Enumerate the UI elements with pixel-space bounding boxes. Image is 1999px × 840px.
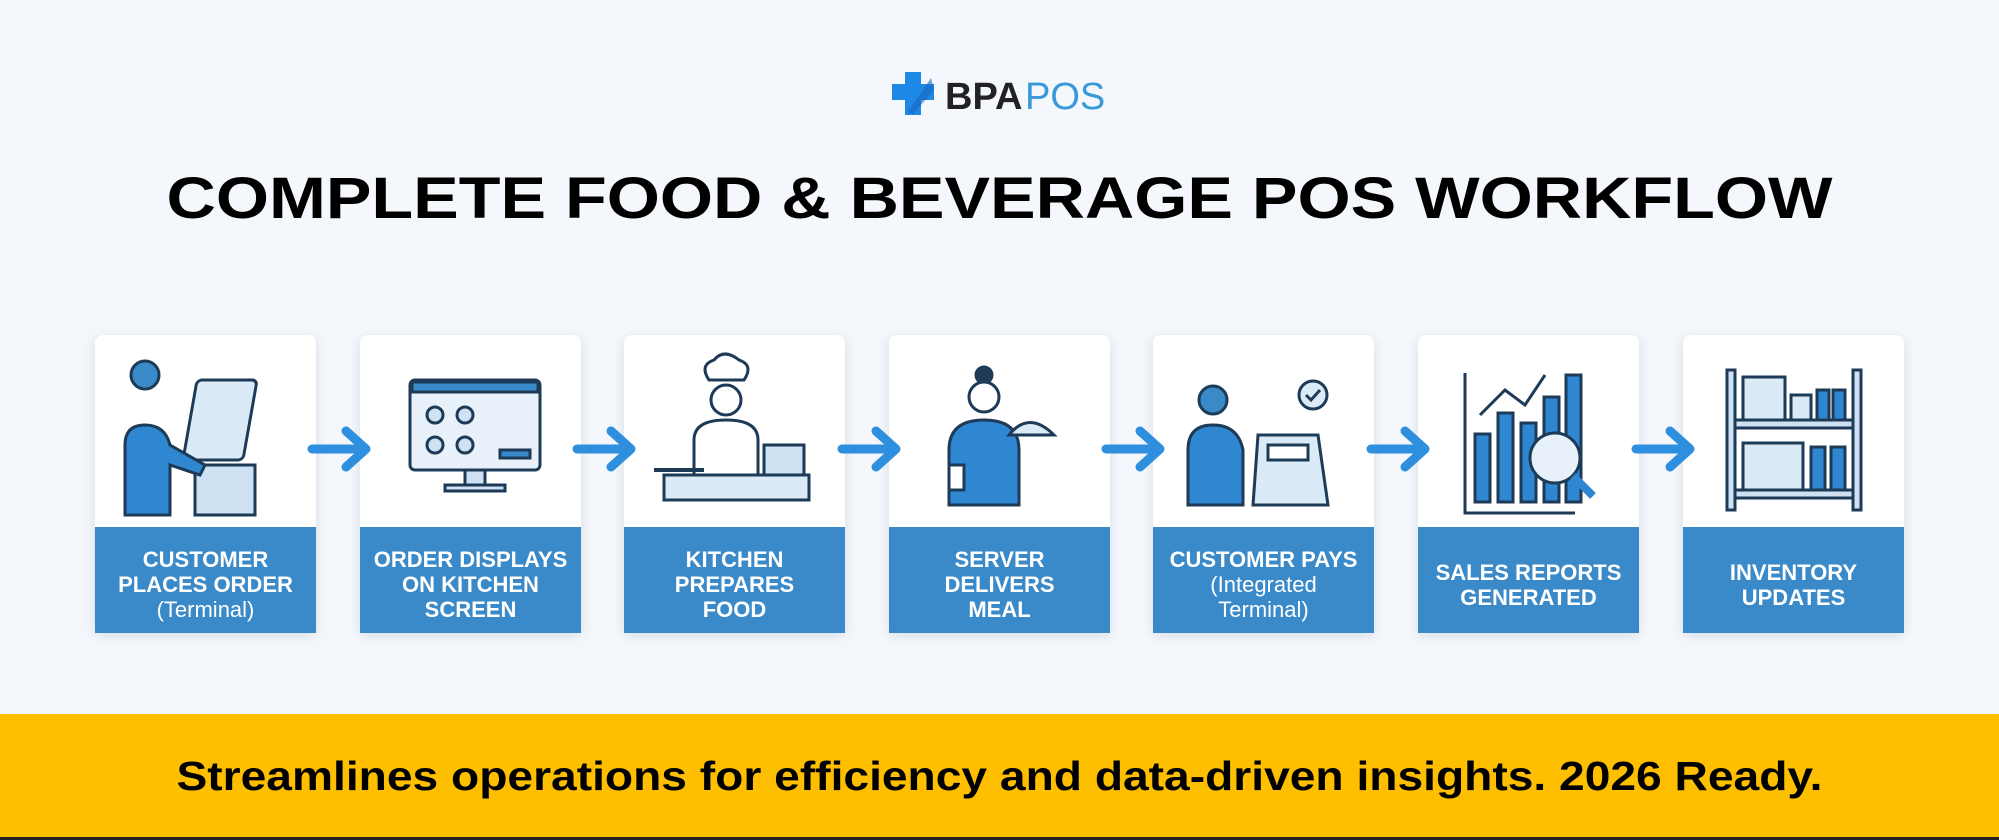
card 5: customer pays: (Integrated (1210, 572, 1317, 597)
card 1: customer places order: (Terminal) (157, 597, 254, 622)
card 2: order displays: ORDER DISPLAYS (374, 547, 567, 572)
icon: customer at kiosk (125, 361, 257, 515)
footer banner: Streamlines operations for efficiency and data-driven insights. 2026 Ready. (176, 753, 1822, 799)
icon: server (949, 367, 1054, 505)
icon: shelves (1727, 370, 1861, 510)
card 2: order displays: SCREEN (425, 597, 516, 622)
card 4: server: SERVER (954, 547, 1045, 572)
card 3: kitchen prepares: PREPARES (675, 572, 794, 597)
card 3: kitchen prepares: KITCHEN (686, 547, 783, 572)
card 5: customer pays (1153, 335, 1374, 633)
arrow 5 (1371, 431, 1425, 467)
card 6: sales reports: GENERATED (1460, 585, 1597, 610)
card 1: customer places order: PLACES ORDER (118, 572, 293, 597)
card 2: order displays (360, 335, 581, 633)
card 6: sales reports (1418, 335, 1639, 633)
arrow 2 (577, 431, 631, 467)
icon: payment terminal (1188, 381, 1328, 505)
card 5: customer pays: CUSTOMER PAYS (1170, 547, 1357, 572)
logo: BPA (945, 76, 1022, 118)
footer banner (0, 714, 1999, 840)
icon: chef (654, 354, 809, 500)
card 4: server: MEAL (968, 597, 1031, 622)
card 3: kitchen prepares (624, 335, 845, 633)
card 2: order displays: ON KITCHEN (402, 572, 539, 597)
icon: kitchen screen (410, 380, 540, 491)
card 7: inventory: INVENTORY (1730, 560, 1857, 585)
arrow 1 (312, 431, 366, 467)
card 6: sales reports: SALES REPORTS (1436, 560, 1621, 585)
arrow 3 (842, 431, 896, 467)
logo (892, 72, 1105, 118)
title: COMPLETE FOOD & BEVERAGE POS WORKFLOW (166, 166, 1833, 231)
card 3: kitchen prepares: FOOD (703, 597, 766, 622)
card 4: server (889, 335, 1110, 633)
icon: chart with magnifier (1465, 373, 1593, 513)
card 5: customer pays: Terminal) (1218, 597, 1309, 622)
card 7: inventory (1683, 335, 1904, 633)
card 7: inventory: UPDATES (1742, 585, 1845, 610)
card 1: customer places order (95, 335, 316, 633)
arrow 6 (1636, 431, 1690, 467)
logo: POS (1025, 76, 1105, 118)
card 1: customer places order: CUSTOMER (143, 547, 268, 572)
card 4: server: DELIVERS (944, 572, 1055, 597)
arrow 4 (1106, 431, 1160, 467)
